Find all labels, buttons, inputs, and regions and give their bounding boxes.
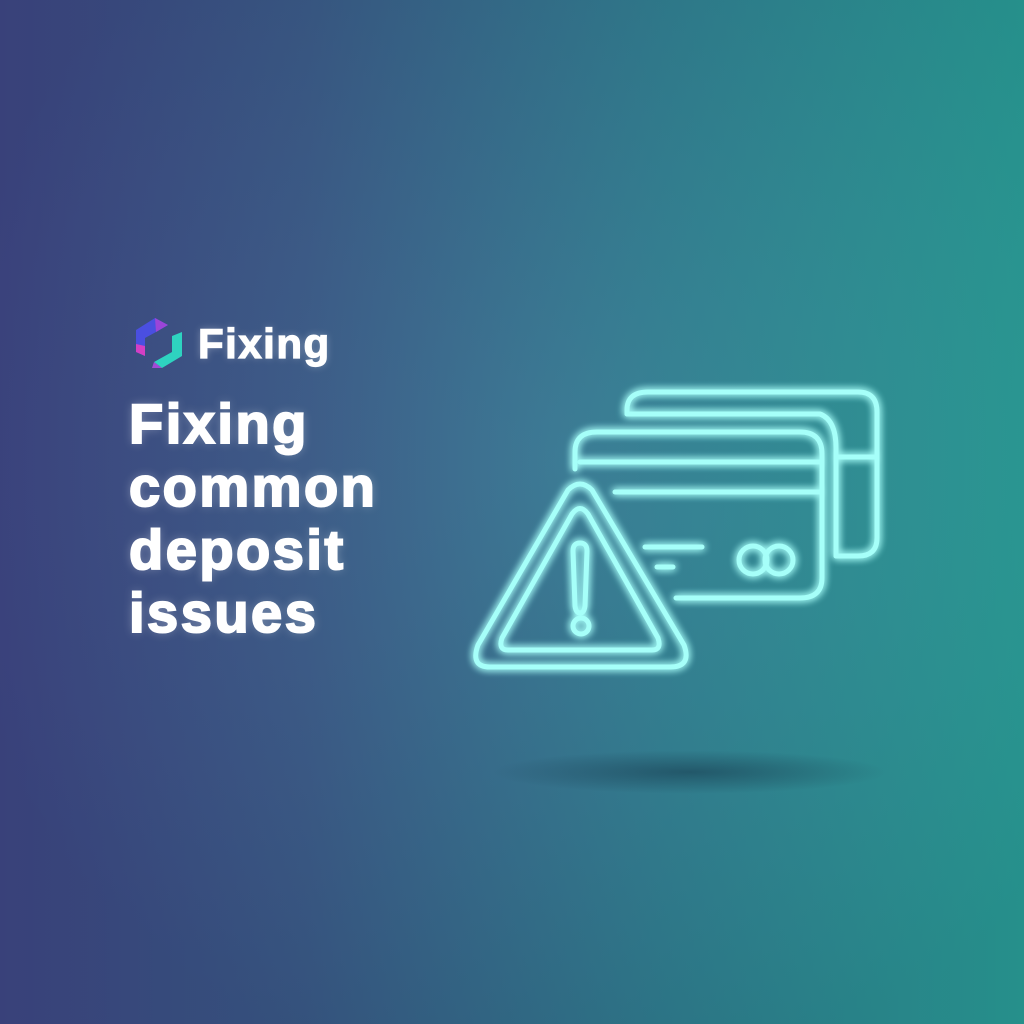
middle card	[575, 432, 822, 598]
title: issues	[129, 581, 318, 644]
shadow under icon	[490, 750, 890, 794]
title: common	[129, 455, 377, 518]
logo: Fixing	[198, 320, 331, 367]
icon: logo hexagon	[136, 318, 182, 368]
back card	[627, 392, 877, 556]
logo	[136, 318, 331, 370]
title: Fixing	[129, 392, 309, 455]
title	[126, 392, 377, 644]
warning triangle	[476, 484, 686, 667]
title: deposit	[129, 518, 346, 581]
